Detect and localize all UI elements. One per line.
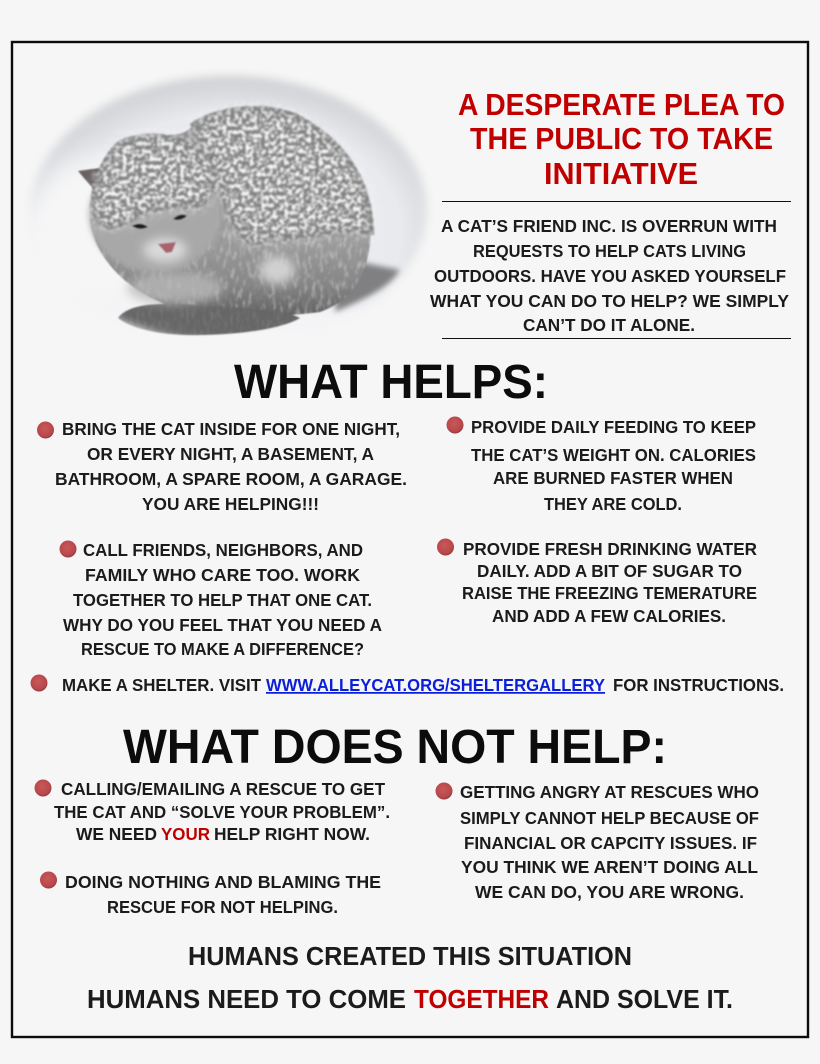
intro paragraph: WHAT YOU CAN DO TO HELP? WE SIMPLY — [430, 291, 789, 311]
item: make a shelter: MAKE A SHELTER. VISIT — [62, 675, 261, 695]
chest — [127, 272, 223, 304]
ears — [78, 167, 100, 188]
item: fresh water: PROVIDE FRESH DRINKING WATER — [463, 539, 757, 559]
intro paragraph: A CAT’S FRIEND INC. IS OVERRUN WITH — [441, 216, 777, 236]
item: bring the cat inside: BRING THE CAT INSIDE FOR ONE NIGHT, — [62, 419, 400, 439]
item: doing nothing — [40, 872, 381, 917]
item: calling or emailing: WE NEED — [76, 824, 157, 844]
item: make a shelter: FOR INSTRUCTIONS. — [613, 675, 784, 695]
heading: what helps: WHAT HELPS: — [234, 356, 548, 409]
tail — [118, 304, 300, 335]
item: daily feeding: ARE BURNED FASTER WHEN — [493, 468, 733, 488]
intro paragraph — [430, 216, 789, 335]
item: fresh water: RAISE THE FREEZING TEMERATURE — [462, 583, 757, 603]
item: call friends: TOGETHER TO HELP THAT ONE CAT. — [73, 590, 372, 610]
closing statement: HUMANS CREATED THIS SITUATION — [188, 943, 632, 971]
intro paragraph: OUTDOORS. HAVE YOU ASKED YOURSELF — [434, 266, 786, 286]
item: calling or emailing: HELP RIGHT NOW. — [214, 824, 370, 844]
title — [458, 87, 785, 191]
item: call friends: WHY DO YOU FEEL THAT YOU NEED A — [63, 615, 382, 635]
title: A DESPERATE PLEA TO — [458, 87, 785, 122]
item: daily feeding: PROVIDE DAILY FEEDING TO KEEP — [471, 417, 756, 437]
item: getting angry: GETTING ANGRY AT RESCUES WHO — [460, 782, 759, 802]
photo: snow-covered cat in soft oval — [32, 72, 428, 336]
shadow right of the cat — [335, 258, 400, 312]
body snow — [190, 106, 374, 245]
item: getting angry: FINANCIAL OR CAPCITY ISSUES. IF — [464, 833, 757, 853]
item: calling or emailing: THE CAT AND “SOLVE YOUR PROBLEM”. — [54, 802, 390, 822]
item: getting angry: SIMPLY CANNOT HELP BECAUSE OF — [460, 808, 759, 828]
item: make a shelter: WWW.ALLEYCAT.ORG/SHELTERGALLERY — [266, 675, 605, 695]
item: call friends — [60, 540, 382, 659]
item: doing nothing: RESCUE FOR NOT HELPING. — [107, 897, 338, 917]
rules around intro — [442, 202, 791, 338]
item: fresh water — [437, 538, 757, 626]
closing statement: HUMANS NEED TO COME — [87, 986, 406, 1014]
item: calling or emailing — [34, 779, 390, 844]
item: bring the cat inside: OR EVERY NIGHT, A BASEMENT, A — [87, 444, 374, 464]
heading: what does not help: WHAT DOES NOT HELP: — [123, 721, 667, 774]
item: calling or emailing: CALLING/EMAILING A RESCUE TO GET — [61, 779, 385, 799]
closing statement — [87, 943, 733, 1014]
closing statement: AND SOLVE IT. — [556, 986, 733, 1014]
item: make a shelter — [30, 674, 784, 695]
item: fresh water: AND ADD A FEW CALORIES. — [492, 606, 726, 626]
item: call friends: RESCUE TO MAKE A DIFFERENCE? — [81, 639, 364, 659]
item: bring the cat inside — [37, 419, 407, 514]
item: getting angry — [436, 782, 759, 902]
item: doing nothing: DOING NOTHING AND BLAMING THE — [65, 872, 381, 892]
item: call friends: FAMILY WHO CARE TOO. WORK — [85, 565, 360, 585]
item: call friends: CALL FRIENDS, NEIGHBORS, AND — [83, 540, 363, 560]
item: bring the cat inside: YOU ARE HELPING!!! — [142, 494, 319, 514]
item: daily feeding: THEY ARE COLD. — [544, 494, 682, 514]
closing statement: TOGETHER — [414, 986, 549, 1014]
muzzle and face — [143, 238, 187, 262]
item: bring the cat inside: BATHROOM, A SPARE ROOM, A GARAGE. — [55, 469, 407, 489]
head — [86, 194, 220, 272]
intro paragraph: CAN’T DO IT ALONE. — [523, 315, 695, 335]
item: getting angry: YOU THINK WE AREN’T DOING ALL — [461, 857, 758, 877]
item: getting angry: WE CAN DO, YOU ARE WRONG. — [475, 882, 744, 902]
item: fresh water: DAILY. ADD A BIT OF SUGAR TO — [477, 561, 742, 581]
item: daily feeding: THE CAT’S WEIGHT ON. CALORIES — [471, 445, 756, 465]
item: daily feeding — [446, 416, 756, 514]
title: INITIATIVE — [544, 156, 698, 191]
intro paragraph: REQUESTS TO HELP CATS LIVING — [473, 241, 746, 261]
title: THE PUBLIC TO TAKE — [470, 121, 773, 156]
item: calling or emailing: YOUR — [161, 824, 210, 844]
